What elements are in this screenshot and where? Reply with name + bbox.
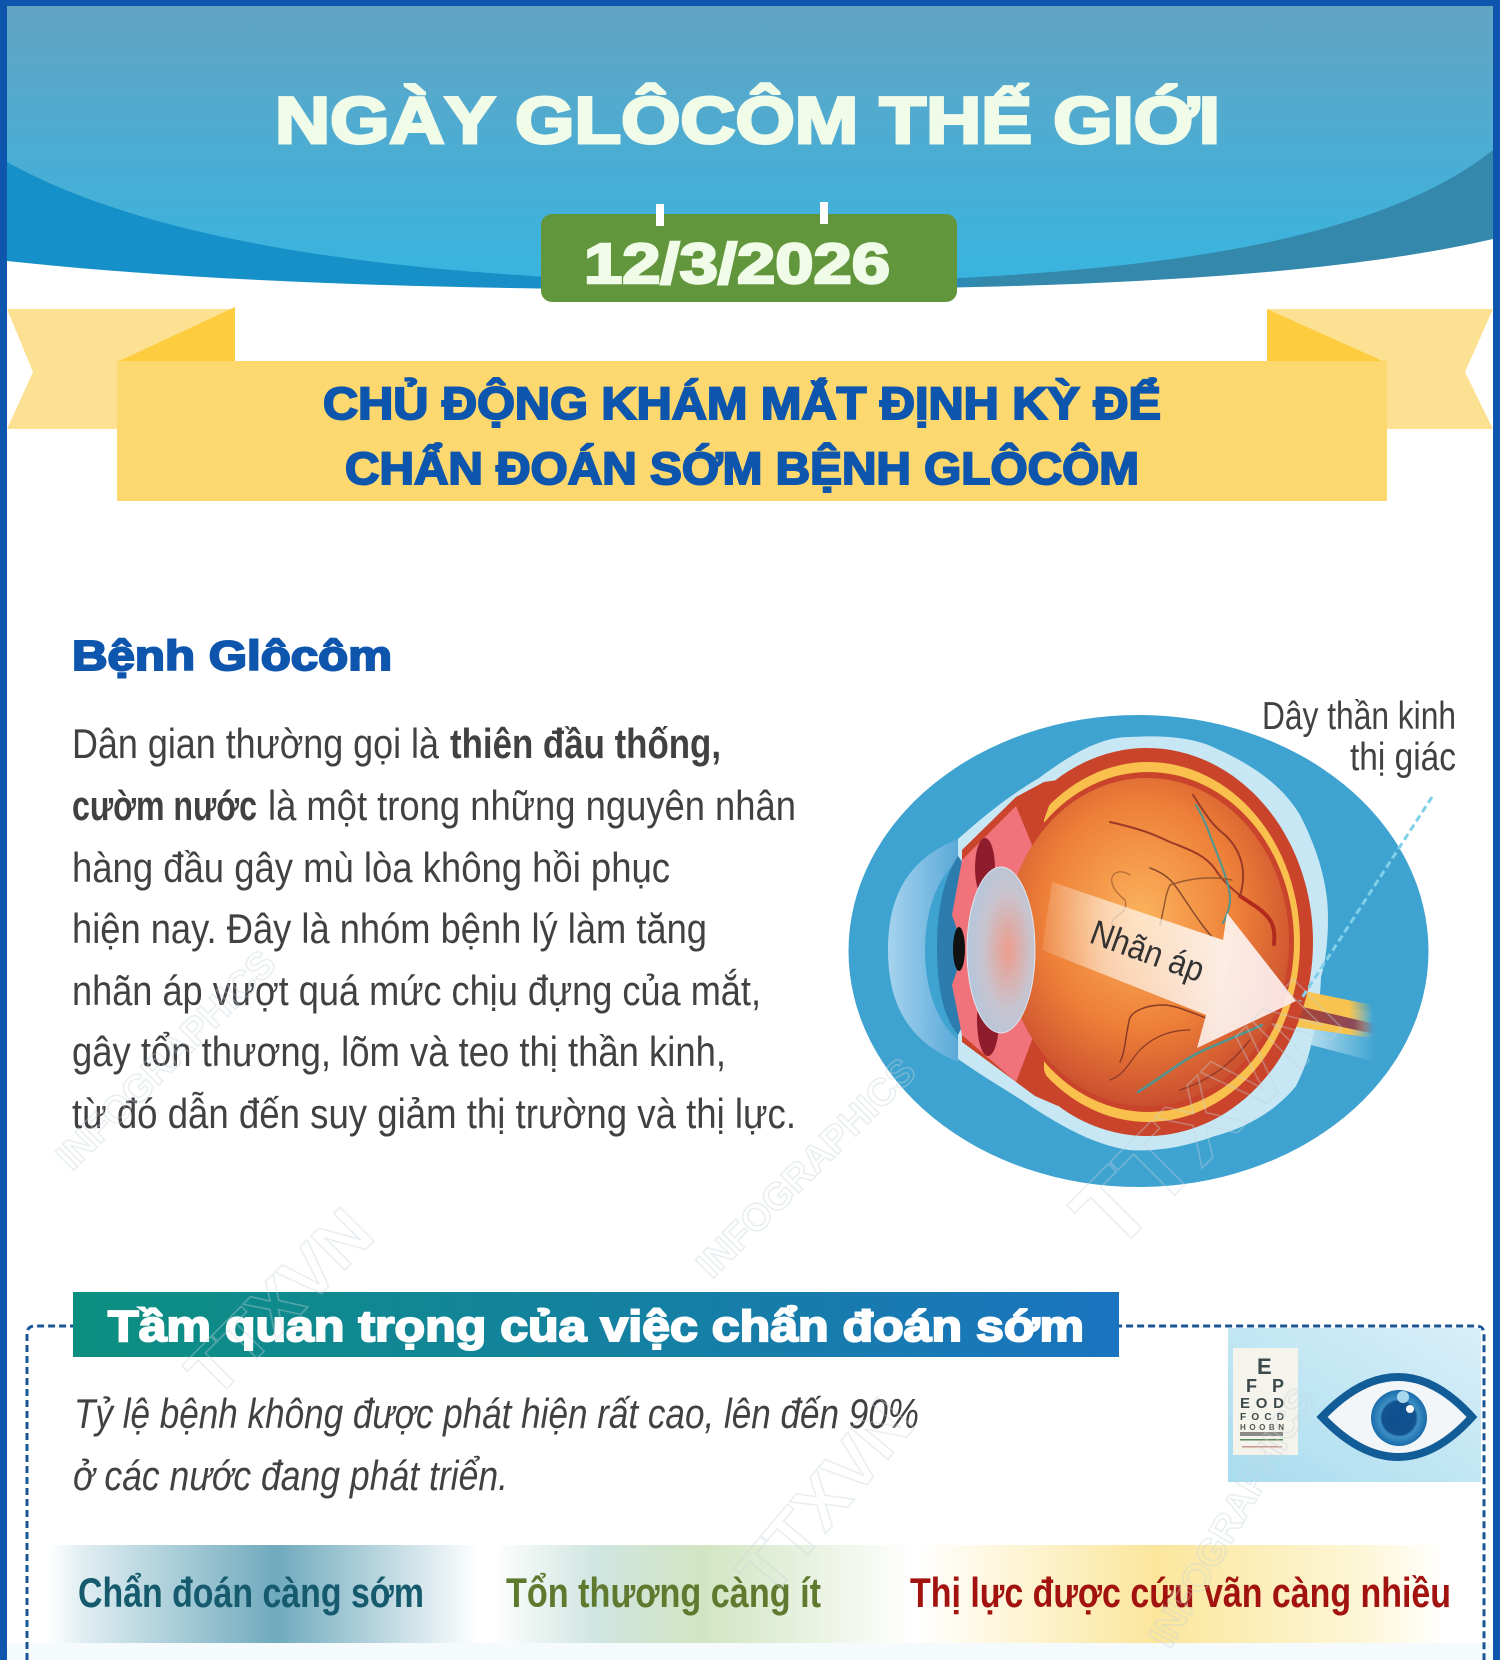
- ribbon text: CHỦ ĐỘNG KHÁM MẮT ĐỊNH KỲ ĐỂ: [323, 378, 1161, 429]
- title: NGÀY GLÔCÔM THẾ GIỚI: [275, 83, 1220, 157]
- description paragraph: hiện nay. Đây là nhóm bệnh lý làm tăng: [72, 905, 707, 952]
- description paragraph: nhãn áp vượt quá mức chịu đựng của mắt,: [72, 967, 761, 1014]
- label: Dây thần kinh thị giác: Dây thần kinh: [1262, 695, 1456, 738]
- watermark: TTXVN: [722, 1384, 929, 1610]
- description paragraph: thiên đầu thống,: [450, 720, 721, 767]
- eye diagram: [848, 715, 1432, 1187]
- description paragraph: [72, 720, 796, 1137]
- watermark: TTXVN: [1051, 960, 1362, 1271]
- eye icon: [1322, 1377, 1472, 1457]
- strip text 1: Chẩn đoán càng sớm: [78, 1569, 424, 1616]
- ribbon text: [323, 378, 1161, 494]
- description paragraph: cườm nước: [72, 782, 257, 829]
- eye chart: E: [1257, 1354, 1272, 1379]
- pressure beam: [1042, 882, 1296, 1048]
- lens: [967, 867, 1035, 1033]
- eye chart: HOOBN: [1240, 1423, 1284, 1432]
- label: Nhãn áp: Nhãn áp: [1085, 913, 1209, 990]
- strip text 2: Tổn thương càng ít: [506, 1569, 821, 1616]
- watermark: INFOGRAPHICS: [1141, 1381, 1323, 1654]
- watermark: INFOGRAPHICS: [49, 943, 284, 1178]
- dashed section frame: [27, 1326, 1484, 1660]
- label: Dây thần kinh thị giác: thị giác: [1350, 736, 1456, 779]
- watermark: INFOGRAPHICS: [689, 1051, 924, 1286]
- section title bar: [73, 1292, 1119, 1357]
- eye chart: [1233, 1348, 1298, 1455]
- ribbon text: CHẨN ĐOÁN SỚM BỆNH GLÔCÔM: [345, 443, 1139, 494]
- eye chart: FOCD: [1240, 1412, 1284, 1423]
- description paragraph: Dân gian thường gọi là: [72, 720, 440, 767]
- eye-test illustration: [1228, 1328, 1481, 1482]
- date badge: [541, 202, 957, 302]
- eyeball pale rim: [958, 736, 1328, 1150]
- description paragraph: gây tổn thương, lõm và teo thị thần kinh,: [72, 1028, 726, 1075]
- eye chart: EOD: [1240, 1395, 1284, 1412]
- italic statement: [73, 1390, 919, 1499]
- gradient strip: diagnosis chain: [48, 1545, 1451, 1643]
- eye chart: FP: [1246, 1376, 1284, 1396]
- optic nerve: [1290, 988, 1376, 1062]
- description paragraph: hàng đầu gây mù lòa không hồi phục: [72, 844, 670, 891]
- description paragraph: từ đó dẫn đến suy giảm thị trường và thị lực.: [72, 1090, 796, 1137]
- date badge: 12/3/2026: [584, 232, 890, 296]
- italic statement: ở các nước đang phát triển.: [73, 1452, 508, 1499]
- header background: [7, 6, 1493, 290]
- italic statement: Tỷ lệ bệnh không được phát hiện rất cao, lên đến 90%: [74, 1390, 919, 1437]
- eyeball layers: [962, 748, 1313, 1136]
- dashed leader line: [1300, 797, 1432, 1001]
- vitreous interior: [1005, 778, 1289, 1106]
- section title bar: Tầm quan trọng của việc chẩn đoán sớm: [108, 1302, 1084, 1351]
- retina veins: [1110, 795, 1274, 1092]
- cornea and iris: [888, 806, 1032, 1082]
- label: Dây thần kinh thị giác: [1262, 695, 1456, 779]
- heading: Bệnh Glôcôm: Bệnh Glôcôm: [72, 632, 392, 679]
- watermark: [49, 943, 1362, 1654]
- ribbon banner: [7, 307, 1493, 501]
- watermark: TTXVN: [170, 1193, 388, 1411]
- description paragraph: là một trong những nguyên nhân: [268, 782, 796, 829]
